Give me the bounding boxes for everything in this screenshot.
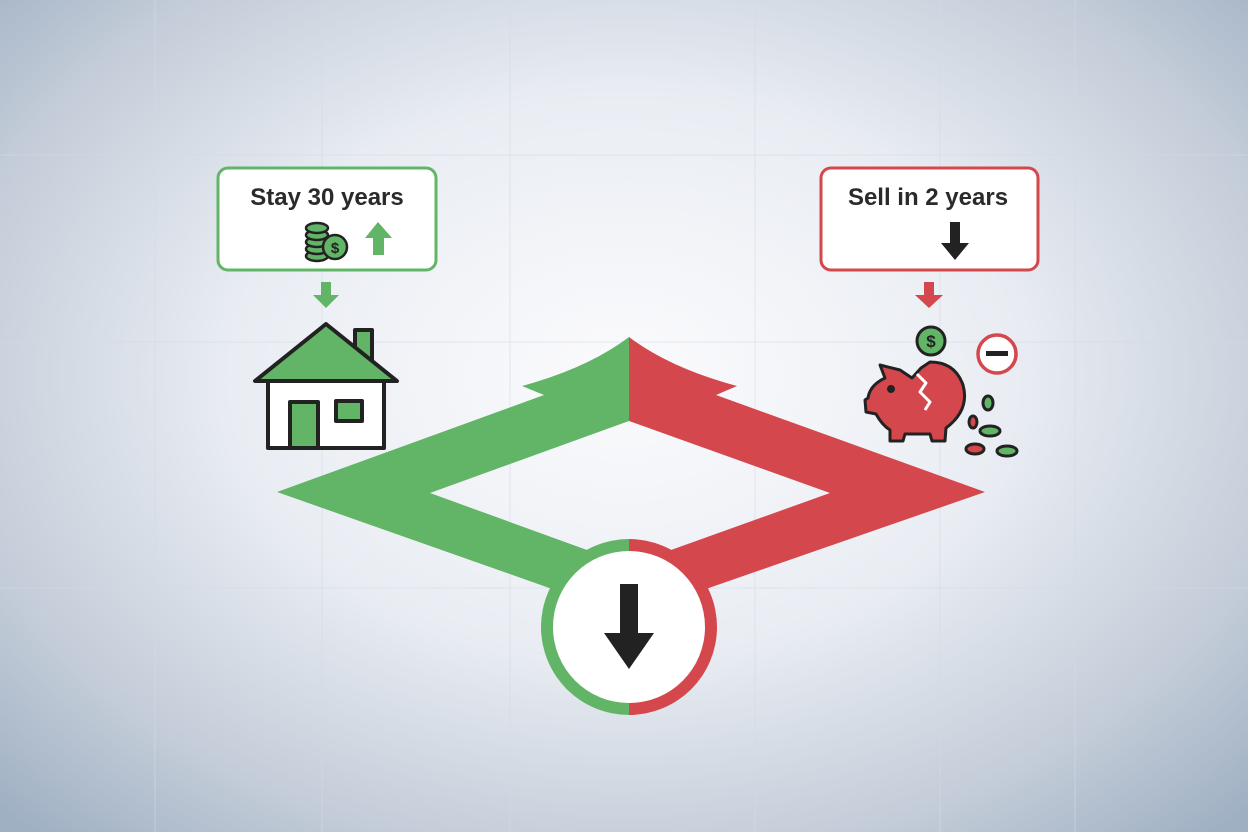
icon: coins: [306, 223, 347, 261]
diamond: red right half: [629, 337, 985, 590]
icon: coins: $: [331, 240, 340, 257]
box: Stay 30 years: [218, 168, 436, 270]
text: Sell in 2 years: Sell in 2 years: [848, 184, 1008, 211]
icon: minus circle: [978, 335, 1016, 373]
result circle with down arrow: [541, 539, 717, 715]
text: Stay 30 years: Stay 30 years: [250, 184, 404, 211]
arrow: green small: [313, 282, 339, 308]
icon: broken piggy bank: $: [926, 332, 936, 351]
icon: house: [255, 324, 397, 448]
diamond: green left half: [277, 337, 629, 590]
icon: down arrow: [604, 584, 654, 669]
icon: down arrow: [941, 222, 969, 260]
icon: broken piggy bank: [865, 327, 1017, 456]
arrow: red small: [915, 282, 943, 308]
box: Sell in 2 years: [821, 168, 1038, 270]
icon: up arrow: [365, 222, 392, 255]
